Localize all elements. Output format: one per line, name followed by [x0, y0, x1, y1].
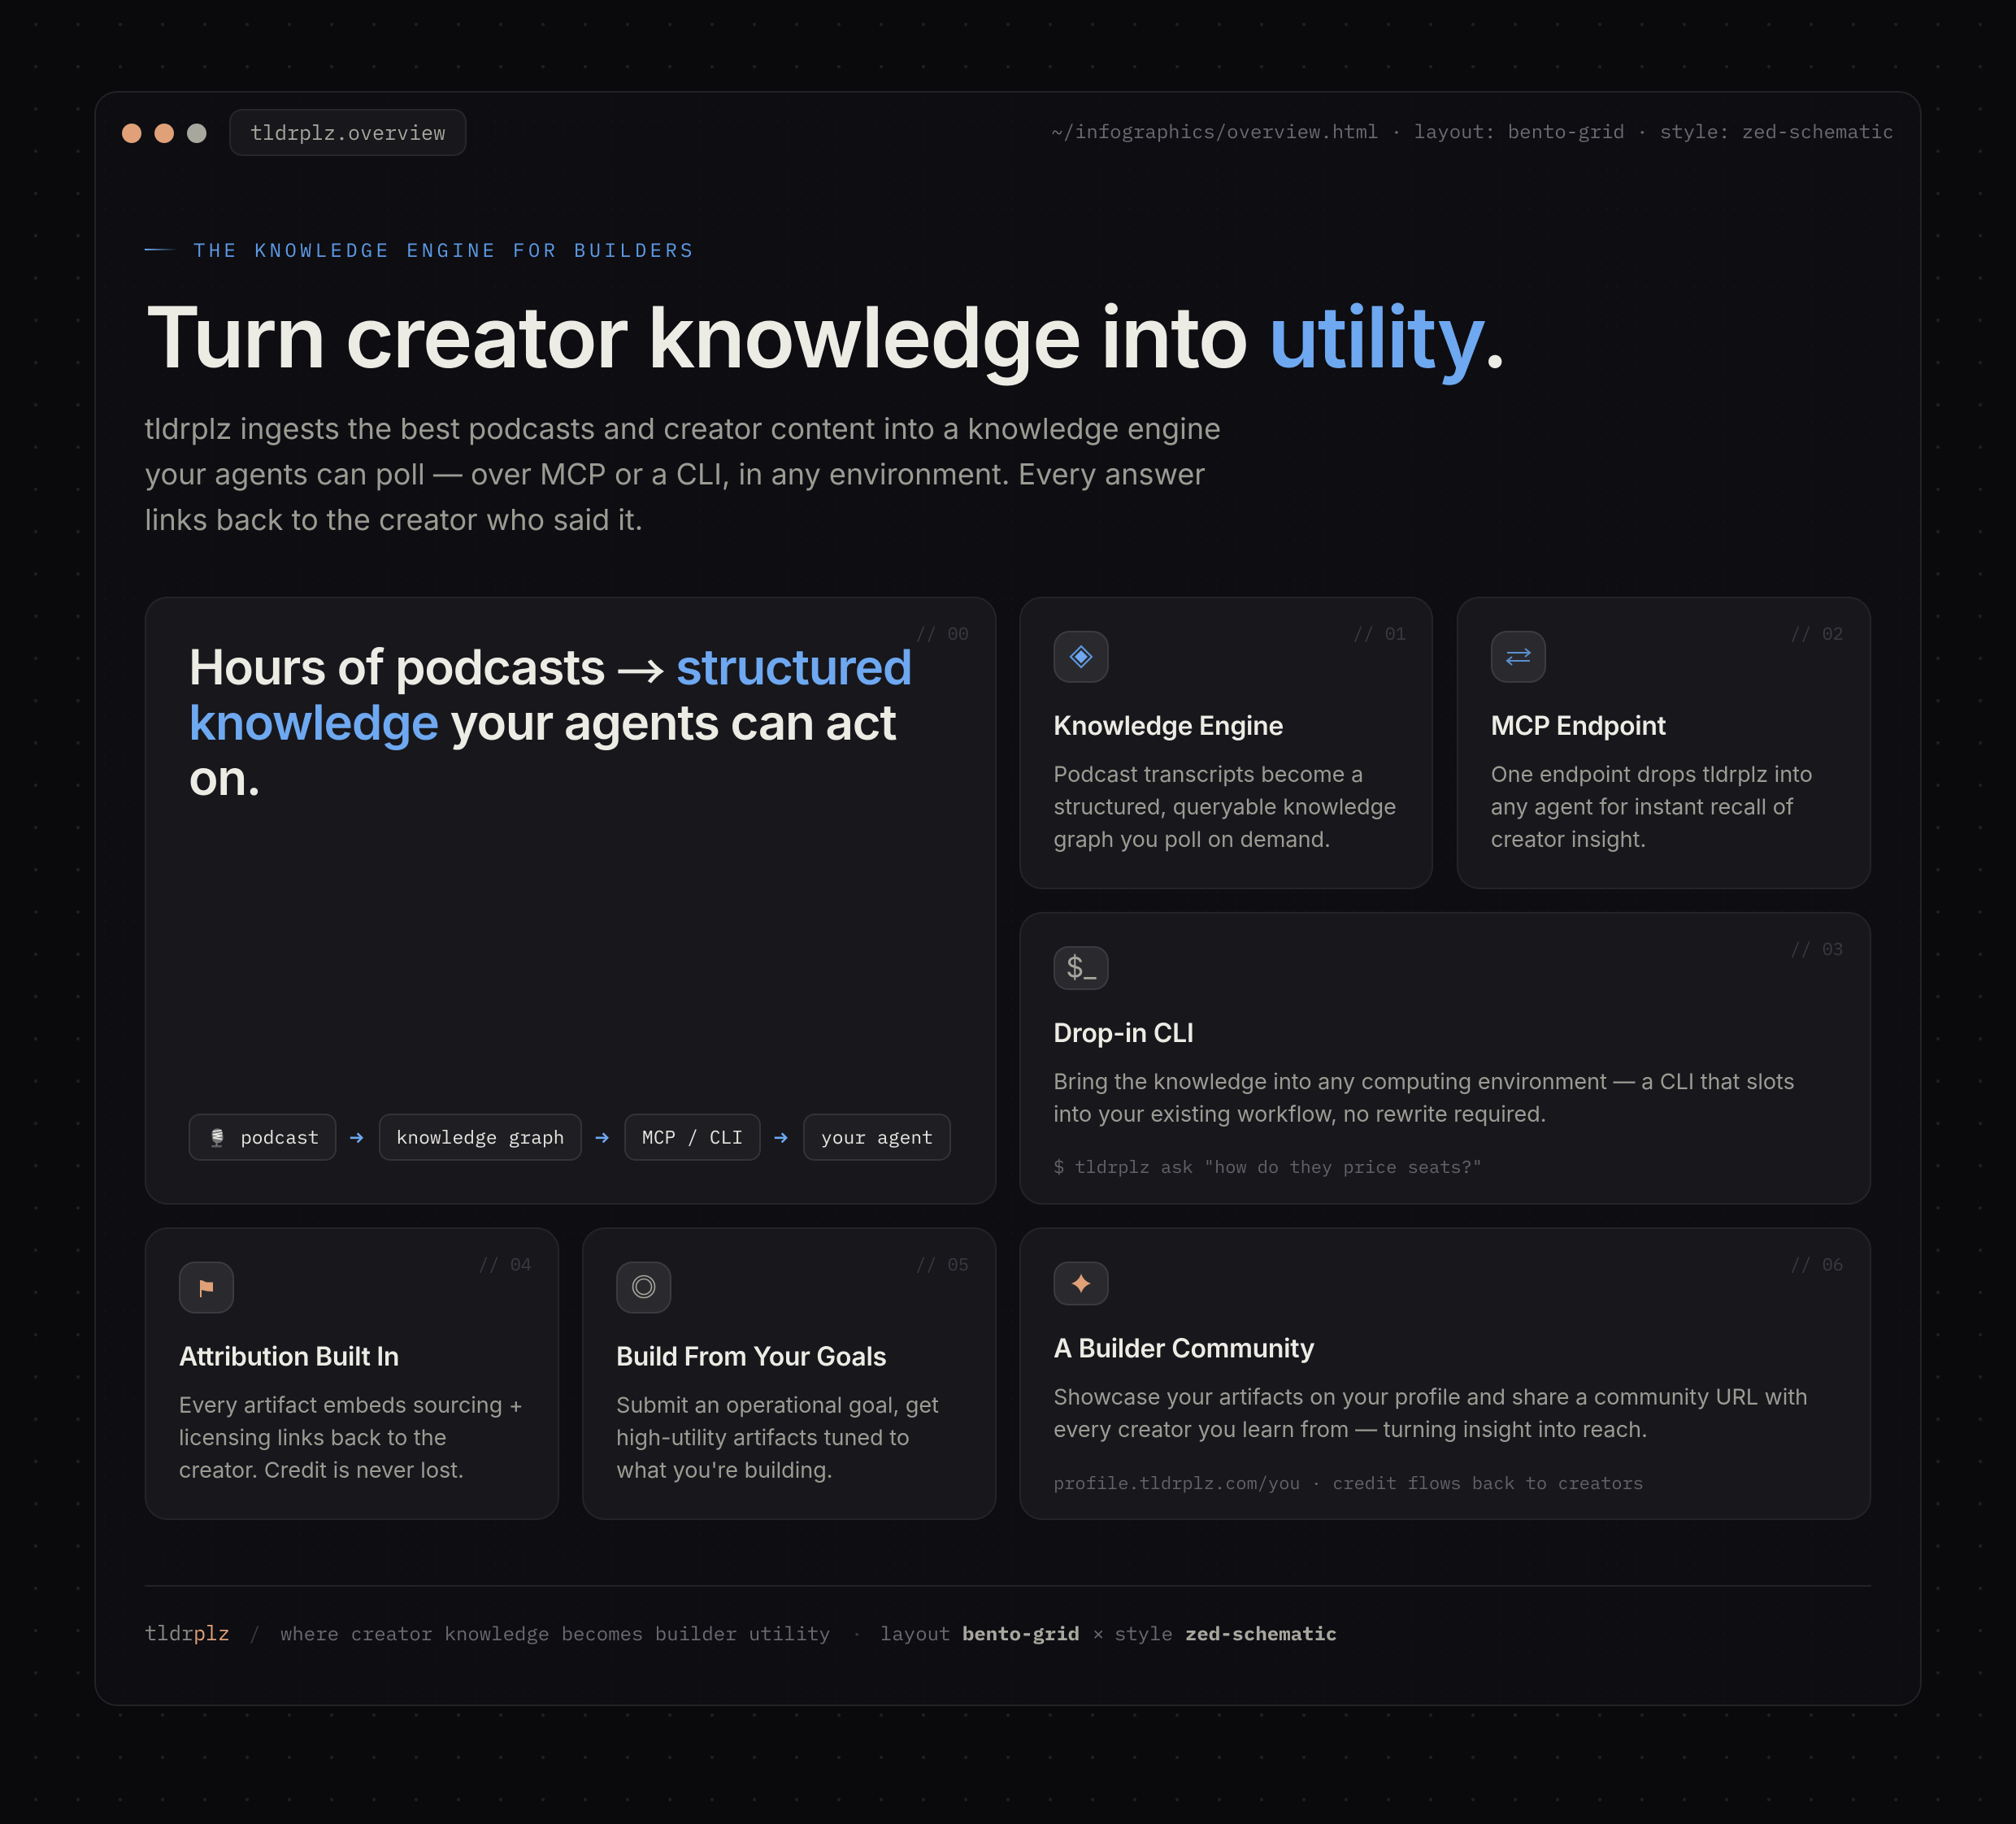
icon: sparkle	[1054, 1262, 1109, 1305]
index label: // 05	[915, 1253, 969, 1276]
footer text: zed-schematic	[1185, 1620, 1337, 1646]
description	[1491, 761, 1813, 853]
description: Showcase your artifacts on your profile and share a community URL with	[1054, 1383, 1808, 1410]
window dot: orange	[122, 124, 141, 143]
description: structured, queryable knowledge	[1054, 793, 1397, 820]
description: what you're building.	[616, 1457, 833, 1483]
heading: Knowledge Engine	[1054, 710, 1284, 741]
description: creator. Credit is never lost.	[179, 1457, 464, 1483]
footer text: bento-grid	[962, 1620, 1080, 1646]
footer text	[145, 1619, 1337, 1646]
index label: // 02	[1790, 622, 1844, 645]
footer text: where creator knowledge becomes builder utility	[280, 1620, 831, 1646]
description	[1054, 1068, 1795, 1127]
pipeline pill: MCP / CLI	[624, 1114, 761, 1161]
description	[179, 1392, 524, 1483]
description: licensing links back to the	[179, 1424, 446, 1451]
arrow: →	[350, 1122, 363, 1153]
footer text: layout	[880, 1620, 950, 1646]
pipeline pill: your agent	[803, 1114, 951, 1161]
profile URL: profile.tldrplz.com/you · credit flows back to creators	[1054, 1471, 1644, 1495]
title: Turn creator knowledge into utility.	[145, 286, 1507, 389]
index label: // 00	[915, 622, 969, 645]
description	[616, 1392, 939, 1483]
index label: // 04	[478, 1253, 532, 1276]
description: Submit an operational goal, get	[616, 1392, 939, 1418]
hero heading	[189, 634, 912, 807]
description: Every artifact embeds sourcing +	[179, 1392, 524, 1418]
intro paragraph: your agents can poll — over MCP or a CLI, in any environment. Every answer	[145, 456, 1206, 492]
description: Podcast transcripts become a	[1054, 761, 1363, 788]
icon: target rings	[616, 1262, 671, 1314]
panel: hero	[145, 597, 997, 1205]
description	[1054, 1383, 1808, 1443]
footer text: style	[1114, 1620, 1173, 1646]
icon: microphone	[211, 1128, 224, 1148]
icon: prompt	[1054, 946, 1109, 990]
pipeline pill: your agent: your agent	[821, 1125, 933, 1149]
description: One endpoint drops tldrplz into	[1491, 761, 1813, 788]
heading: Attribution Built In	[179, 1340, 399, 1372]
hero heading: knowledge your agents can act	[189, 693, 897, 752]
command example: $ tldrplz ask "how do they price seats?"	[1054, 1155, 1483, 1179]
eyebrow: THE KNOWLEDGE ENGINE FOR BUILDERS	[193, 237, 696, 263]
description: high-utility artifacts tuned to	[616, 1424, 910, 1451]
description: into your existing workflow, no rewrite required.	[1054, 1101, 1547, 1127]
pipeline pill: knowledge graph	[379, 1114, 582, 1161]
intro paragraph	[145, 410, 1221, 537]
footer rule	[145, 1585, 1871, 1587]
icon: diamond	[1054, 631, 1109, 683]
heading: A Builder Community	[1054, 1332, 1314, 1364]
panel: drop-in CLI	[1019, 912, 1871, 1205]
arrow: →	[595, 1122, 609, 1153]
footer text: tldrplz	[145, 1619, 230, 1646]
hero heading: on.	[189, 749, 261, 807]
panel: community	[1019, 1227, 1871, 1520]
index label: // 01	[1353, 622, 1406, 645]
footer text: ·	[851, 1620, 862, 1646]
pipeline pill: knowledge graph: knowledge graph	[396, 1125, 564, 1149]
description	[1054, 761, 1397, 853]
description: every creator you learn from — turning insight into reach.	[1054, 1416, 1648, 1443]
eyebrow rule	[145, 249, 177, 250]
heading: Build From Your Goals	[616, 1340, 887, 1372]
heading: Drop-in CLI	[1054, 1017, 1193, 1049]
intro paragraph: tldrplz ingests the best podcasts and creator content into a knowledge engine	[145, 410, 1221, 446]
pipeline pill: MCP / CLI: MCP / CLI	[642, 1125, 743, 1149]
footer text: /	[249, 1620, 260, 1646]
description: graph you poll on demand.	[1054, 826, 1331, 853]
panel: MCP endpoint	[1457, 597, 1871, 889]
icon: flag	[179, 1262, 234, 1314]
panel: knowledge engine	[1019, 597, 1433, 889]
pipeline pill: podcast: podcast	[241, 1125, 319, 1149]
description: creator insight.	[1491, 826, 1646, 853]
tab: tldrplz.overview	[229, 109, 467, 156]
tab: tldrplz.overview: tldrplz.overview	[250, 119, 445, 145]
description: any agent for instant recall of	[1491, 793, 1794, 820]
icon: exchange arrows	[1491, 631, 1546, 683]
arrow: →	[774, 1122, 788, 1153]
index label: // 06	[1790, 1253, 1844, 1276]
panel: goals	[582, 1227, 997, 1520]
hero heading: Hours of podcasts → structured	[189, 634, 912, 705]
footer text: ×	[1093, 1620, 1104, 1646]
panel: attribution	[145, 1227, 559, 1520]
icon: prompt: $_	[1066, 951, 1097, 984]
intro paragraph: links back to the creator who said it.	[145, 502, 643, 537]
heading: MCP Endpoint	[1491, 710, 1666, 741]
description: Bring the knowledge into any computing environment — a CLI that slots	[1054, 1068, 1795, 1095]
window dot: orange	[154, 124, 174, 143]
pipeline pill: podcast	[189, 1114, 337, 1161]
index label: // 03	[1790, 937, 1844, 961]
window dot: grey	[187, 124, 206, 143]
path meta text: ~/infographics/overview.html · layout: bento-grid · style: zed-schematic	[1051, 118, 1894, 144]
